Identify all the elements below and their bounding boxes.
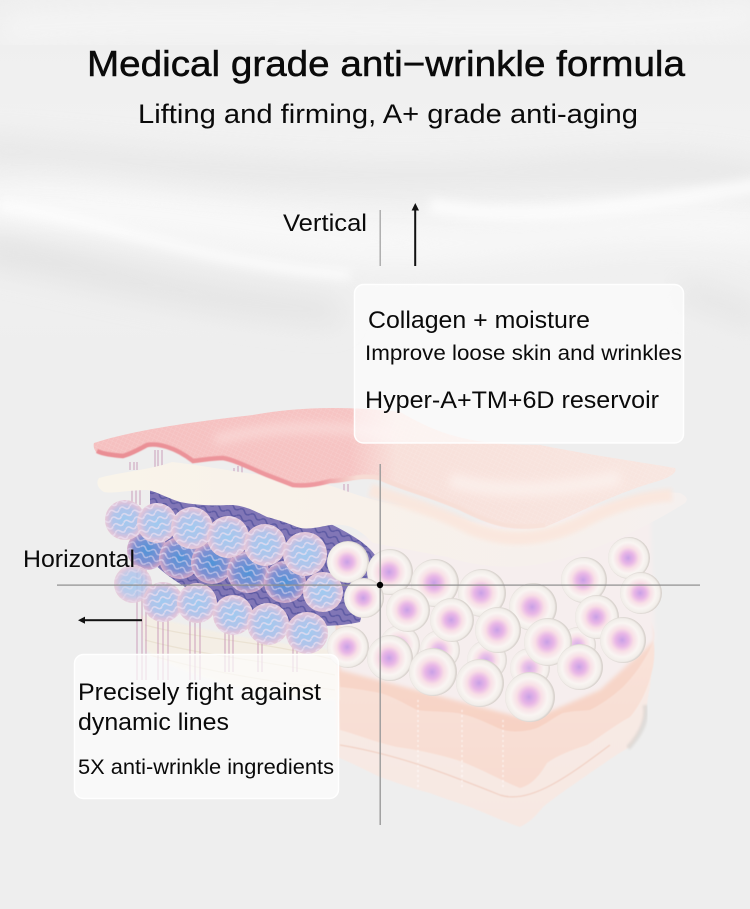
pink surface layer bbox=[94, 408, 676, 529]
panel text: improve skin: Improve loose skin and wrinkles bbox=[365, 342, 682, 365]
axis origin dot bbox=[377, 582, 383, 588]
pearl moisture spheres bbox=[327, 537, 662, 722]
axis: horizontal line bbox=[57, 584, 700, 586]
bottom peach dermis layers bbox=[335, 620, 654, 827]
axis label: vertical: Vertical bbox=[283, 210, 367, 237]
panel heading: precisely: Precisely fight against bbox=[78, 679, 321, 706]
axis: vertical line lower bbox=[380, 464, 381, 825]
arrow: vertical upward bbox=[412, 203, 419, 266]
panel: collagen and moisture bbox=[354, 284, 684, 443]
blue collagen spheres: back row bbox=[127, 490, 375, 626]
subtitle: Lifting and firming, A+ grade anti-aging bbox=[138, 99, 638, 129]
arrow: horizontal leftward bbox=[78, 617, 142, 624]
panel text: ingredients: 5X anti-wrinkle ingredients bbox=[78, 756, 334, 779]
panel heading second line: dynamic lines bbox=[78, 709, 229, 736]
title: Medical grade anti−wrinkle formula bbox=[87, 43, 686, 84]
panel: dynamic lines bbox=[74, 654, 338, 798]
illustration: layered skin cross-section bbox=[94, 408, 687, 827]
axis: vertical line upper bbox=[380, 210, 381, 266]
blue collagen spheres: front rows bbox=[105, 500, 343, 654]
panel text: reservoir: Hyper-A+TM+6D reservoir bbox=[365, 387, 659, 414]
collagen fibres bbox=[130, 450, 348, 680]
panel heading: collagen: Collagen + moisture bbox=[368, 307, 590, 334]
faded yellow fibre layer, left bbox=[140, 615, 340, 700]
axis label: horizontal: Horizontal bbox=[23, 546, 135, 573]
peach rim under surface layer bbox=[370, 490, 672, 538]
white epidermis layer bbox=[97, 462, 687, 567]
pearl sphere backing haze bbox=[340, 500, 655, 720]
